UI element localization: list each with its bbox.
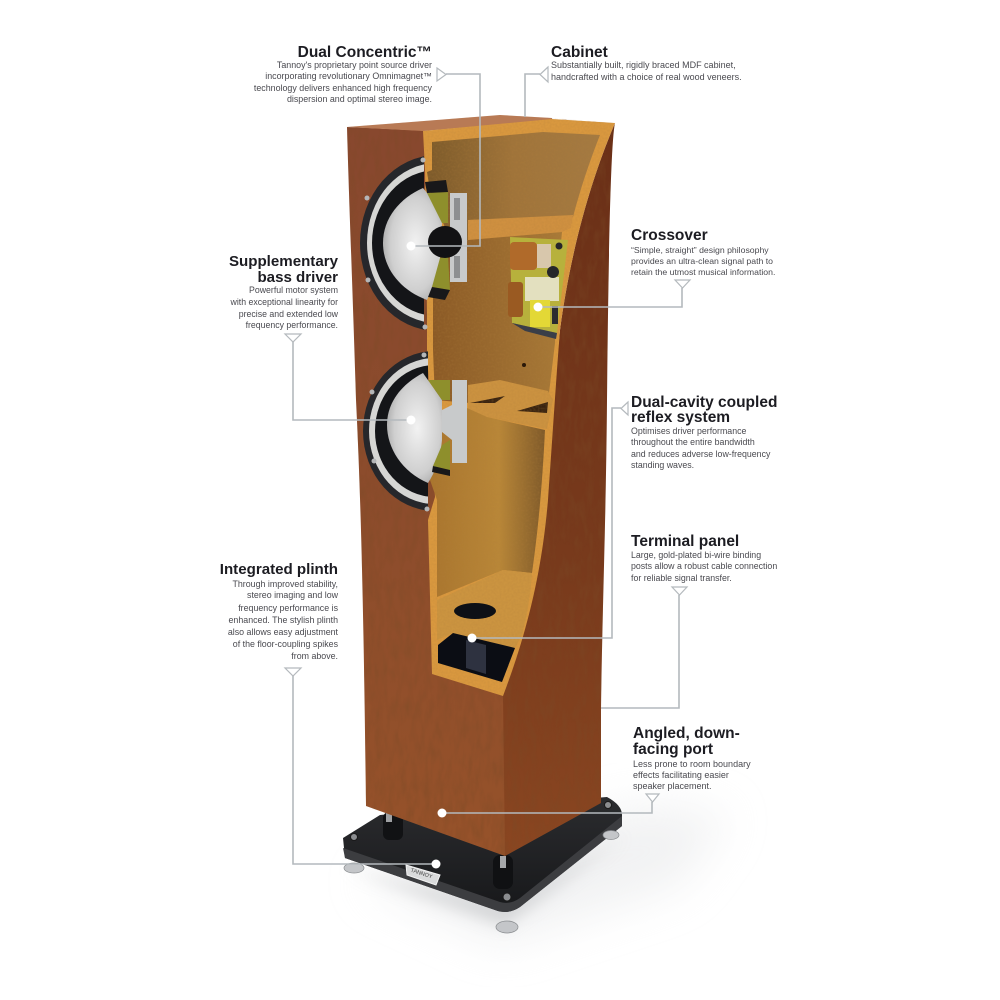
leader: Dual-cavity <box>468 402 628 642</box>
badge <box>406 865 440 885</box>
upper shelf <box>468 215 573 240</box>
bracket <box>450 193 467 282</box>
coils <box>508 242 537 317</box>
callout: Supplementary bass driver: frequency performance. <box>246 320 338 330</box>
callout: Integrated plinth: frequency performance is <box>238 603 339 613</box>
badge: TANNOY <box>410 868 433 880</box>
callout: Dual Concentric: dispersion and optimal stereo image. <box>287 94 432 104</box>
callout: Integrated plinth <box>220 561 339 661</box>
callout: Supplementary bass driver: bass driver <box>257 269 338 286</box>
callout: Crossover: Crossover <box>631 227 708 244</box>
callout: Cabinet: Cabinet <box>551 44 608 61</box>
callout: Supplementary bass driver: Supplementary <box>229 253 339 270</box>
leader: Crossover <box>534 280 690 312</box>
top surface <box>347 115 552 131</box>
floor shadow <box>345 805 730 945</box>
plinth bolts <box>350 802 612 901</box>
callout: Integrated plinth: stereo imaging and low <box>247 590 339 600</box>
plinth plate <box>343 797 622 912</box>
speaker cabinet <box>340 105 620 865</box>
grain on timber <box>420 115 620 700</box>
callout: Dual-cavity: standing waves. <box>631 460 694 470</box>
lower driver <box>363 351 467 512</box>
callout: Crossover: provides an ultra-clean signal path to <box>631 256 773 266</box>
callout: Terminal panel: posts allow a robust cable connection <box>631 561 777 571</box>
dome <box>428 226 462 258</box>
callout: Dual-cavity: Optimises driver performance <box>631 426 746 436</box>
driver bolts <box>370 352 430 512</box>
callout: Angled port: Angled, down- <box>633 725 740 742</box>
middle cavity <box>433 232 562 403</box>
callout: Dual Concentric: incorporating revolutionary Omnimagnet™ <box>265 71 432 81</box>
callout: Dual Concentric <box>254 44 433 104</box>
callout: Dual Concentric: Tannoy's proprietary point source driver <box>277 60 432 70</box>
wood grain overlay <box>340 105 620 865</box>
callout: Angled port <box>633 725 751 791</box>
plinth spikes <box>383 812 513 889</box>
leader: Integrated plinth <box>285 668 440 868</box>
upper cavity <box>427 132 600 240</box>
callout: Angled port: speaker placement. <box>633 781 712 791</box>
leader: Cabinet <box>525 67 548 117</box>
motor <box>427 192 448 223</box>
driver rings <box>363 351 428 510</box>
plinth <box>343 797 622 933</box>
callout: Terminal panel: Terminal panel <box>631 533 739 550</box>
callout: Dual Concentric: Dual Concentric™ <box>298 44 432 61</box>
leader: Supplementary bass driver <box>285 334 416 424</box>
plinth feet <box>344 830 619 933</box>
callout: Dual-cavity <box>631 394 777 470</box>
callout: Crossover: “Simple, straight” design philosophy <box>631 245 769 255</box>
lower cavity <box>430 408 545 597</box>
callout: Integrated plinth: enhanced. The stylish plinth <box>229 615 338 625</box>
callout: Angled port: Less prone to room boundary <box>633 759 751 769</box>
callout: Terminal panel <box>631 533 777 583</box>
callout: Crossover <box>631 227 775 277</box>
callout: Dual Concentric: technology delivers enhanced high frequency <box>254 83 433 93</box>
callout: Integrated plinth: Through improved stability, <box>232 579 338 589</box>
driver cone <box>383 188 442 300</box>
callout: Cabinet: Substantially built, rigidly braced MDF cabinet, <box>551 60 736 70</box>
cut face <box>423 119 615 696</box>
driver cone <box>387 373 442 483</box>
callout: Integrated plinth: from above. <box>291 651 338 661</box>
callout: Supplementary bass driver: Powerful motor system <box>249 285 338 295</box>
callout: Dual-cavity: and reduces adverse low-frequency <box>631 449 771 459</box>
driver bolts <box>364 158 428 330</box>
port opening <box>438 633 515 682</box>
callout: Cabinet <box>551 44 742 82</box>
callout: Terminal panel: for reliable signal transfer. <box>631 573 732 583</box>
callout: Cabinet: handcrafted with a choice of real wood veneers. <box>551 72 742 82</box>
bracket <box>442 380 467 463</box>
callout: Supplementary bass driver: precise and extended low <box>239 309 339 319</box>
small hole <box>522 363 526 367</box>
callout: Integrated plinth: Integrated plinth <box>220 561 338 578</box>
callout: Dual-cavity: throughout the entire bandwidth <box>631 437 755 447</box>
callout: Dual-cavity: reflex system <box>631 409 730 426</box>
middle shelf <box>468 380 553 429</box>
callout: Angled port: effects facilitating easier <box>633 770 729 780</box>
side veneer face <box>503 123 615 856</box>
reflex hole <box>454 603 496 619</box>
callout: Supplementary bass driver: with exceptional linearity for <box>230 297 338 307</box>
callout: Terminal panel: Large, gold-plated bi-wire binding <box>631 550 761 560</box>
callout: Angled port: facing port <box>633 741 713 758</box>
callout: Supplementary bass driver <box>229 253 339 330</box>
upper driver <box>360 156 467 330</box>
shelf slots <box>470 396 548 413</box>
cavity floor <box>437 570 532 648</box>
leader: Angled port <box>438 794 659 818</box>
callout: Dual-cavity: Dual-cavity coupled <box>631 394 777 411</box>
crossover board <box>508 237 568 339</box>
callout: Integrated plinth: of the floor-coupling spikes <box>233 639 339 649</box>
leader: Dual Concentric <box>406 68 480 250</box>
front veneer face <box>347 127 505 856</box>
components <box>537 244 551 268</box>
callout: Integrated plinth: also allows easy adjustment <box>228 627 339 637</box>
driver rings <box>360 156 424 330</box>
motor <box>428 380 450 400</box>
leader: Terminal panel <box>601 587 687 708</box>
callout: Crossover: retain the utmost musical information. <box>631 267 775 277</box>
